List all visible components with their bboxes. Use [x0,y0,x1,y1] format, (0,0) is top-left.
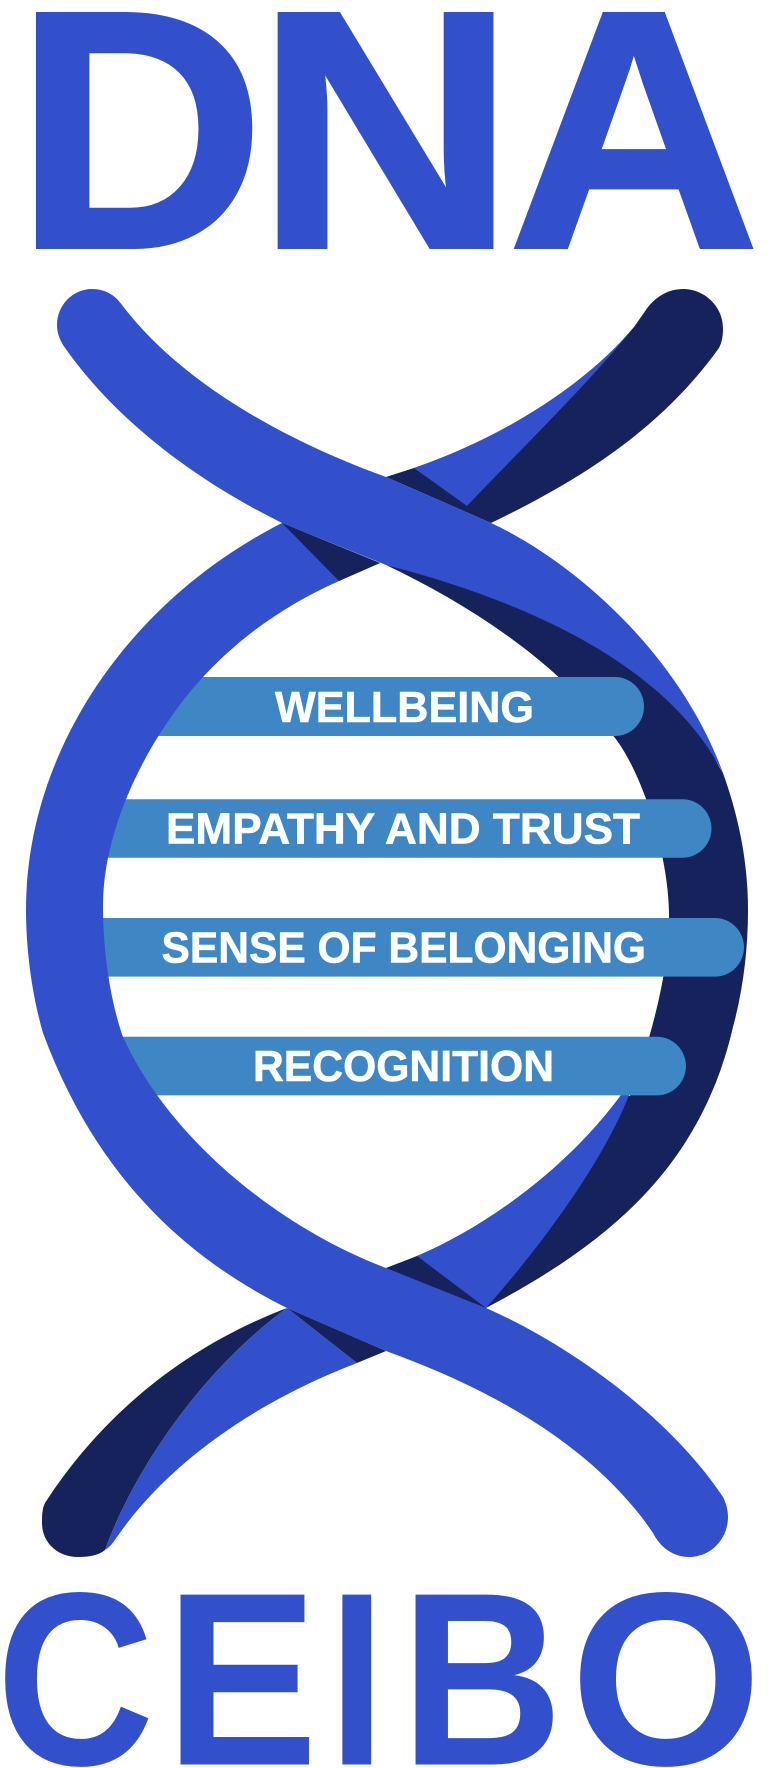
bar: recognition [110,1037,686,1095]
bar: sense of belonging [90,918,744,977]
front strand: left side to bottom right [26,523,728,1557]
bottom crossing shadow [287,1308,386,1363]
lower left strand: blue highlight [105,1308,357,1550]
top crossing shadow [282,523,380,581]
lower left strand: navy end [42,1308,287,1557]
bar: wellbeing [150,677,644,736]
front strand: top left to right sliver [57,289,723,773]
top right strand: navy end [386,289,723,523]
title: CEIBO [0,1541,762,1768]
bar: empathy and trust [100,799,712,858]
label: empathy and trust: EMPATHY AND TRUST [166,804,640,854]
top right strand: blue highlight [414,327,634,506]
DNA helix [26,289,748,1557]
label: wellbeing: WELLBEING [275,683,534,732]
lower right strand: blue highlight [417,1095,629,1308]
right strand: navy band [386,565,748,1308]
label: sense of belonging: SENSE OF BELONGING [162,924,646,972]
label: recognition: RECOGNITION [253,1042,554,1091]
title: DNA [14,0,760,320]
